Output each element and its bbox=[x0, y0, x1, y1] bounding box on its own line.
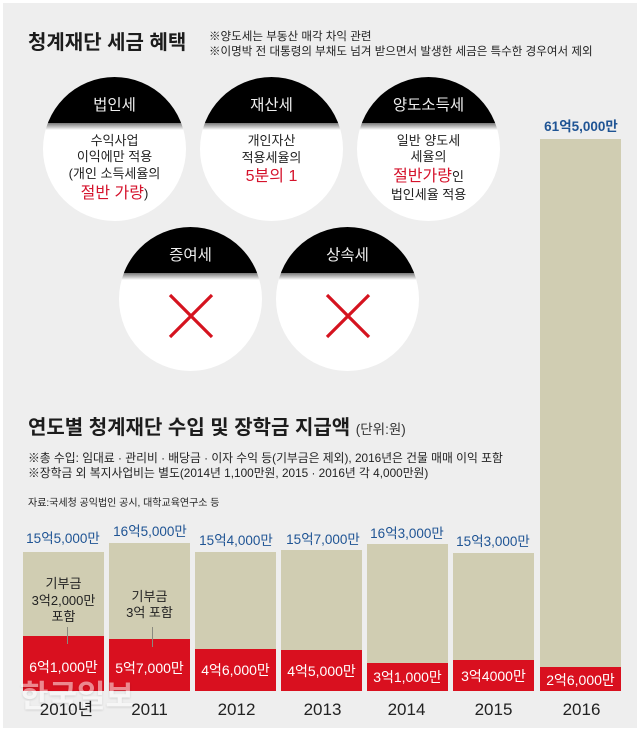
bar: 2010 bbox=[23, 552, 104, 691]
panel: inheritance tax circle bbox=[276, 227, 419, 371]
bar segment: 2012 scholarship: 4억6,000만 bbox=[201, 662, 270, 678]
watermark: 한국일보 bbox=[20, 679, 134, 714]
title: yearly income and scholarships: 연도별 청계재단 수입 및 장학금 지급액 (단위:원) bbox=[28, 417, 406, 439]
notes: tax benefit footnotes: ※양도세는 부동산 매각 차익 관련 bbox=[209, 31, 371, 43]
panel: property tax circle bbox=[200, 77, 343, 221]
axis label: 2016: 2016 bbox=[563, 700, 600, 719]
bar value: 2010: 15억5,000만 bbox=[26, 531, 100, 546]
axis label: 2011: 2011 bbox=[131, 700, 168, 719]
panel: capital gains tax circle: 일반 양도세 bbox=[397, 133, 460, 148]
bar value: 2012: 15억4,000만 bbox=[199, 533, 273, 548]
notes: income footnotes: ※총 수입: 임대료 · 관리비 · 배당금 · 이자 수익 등(기부금은 제외), 2016년은 건물 매매 이익 포함 bbox=[28, 451, 503, 465]
panel: property tax circle: 5분의 1 bbox=[246, 168, 297, 185]
panel: capital gains tax circle bbox=[357, 77, 500, 221]
bar segment: 2016 scholarship: 2억6,000만 bbox=[546, 672, 615, 688]
panel: capital gains tax circle: 양도소득세 bbox=[393, 97, 464, 114]
source note: 자료:국세청 공익법인 공시, 대학교육연구소 등 bbox=[28, 498, 219, 509]
notes: income footnotes bbox=[28, 451, 503, 480]
bar: 2013 bbox=[281, 550, 362, 691]
panel: capital gains tax circle: 세율의 bbox=[411, 149, 446, 164]
leader line: 2010 bbox=[67, 627, 68, 644]
axis label: 2012: 2012 bbox=[218, 700, 255, 719]
panel: corporate tax circle: 이익에만 적용 bbox=[77, 149, 152, 164]
panel: property tax circle: 개인자산 bbox=[248, 133, 295, 148]
bar segment: 2013 scholarship bbox=[281, 650, 362, 691]
bar: 2016 bbox=[540, 139, 621, 691]
bar segment: 2014 scholarship: 3억1,000만 bbox=[373, 669, 442, 685]
axis label: 2014: 2014 bbox=[388, 700, 425, 719]
bar value: 2011: 16억5,000만 bbox=[113, 524, 187, 539]
bar segment: 2012 scholarship bbox=[195, 649, 276, 691]
notes: tax benefit footnotes bbox=[209, 30, 593, 58]
bar segment: 2014 scholarship bbox=[367, 663, 448, 691]
panel: inheritance tax circle: 상속세 bbox=[326, 247, 369, 264]
icon: red cross bbox=[168, 294, 214, 338]
panel: capital gains tax circle: 법인세율 적용 bbox=[391, 187, 466, 202]
notes: tax benefit footnotes: ※이명박 전 대통령의 부채도 넘겨 받으면서 발생한 세금은 특수한 경우여서 제외 bbox=[209, 46, 593, 58]
title: foundation tax benefits: 청계재단 세금 혜택 bbox=[28, 32, 186, 54]
annotation: 2011 donation: 기부금 bbox=[132, 589, 167, 604]
annotation: 2011 donation: 3억 포함 bbox=[126, 605, 173, 620]
panel: gift tax circle bbox=[119, 227, 262, 371]
bar value: 2013: 15억7,000만 bbox=[286, 532, 360, 547]
bar value: 2016: 61억5,000만 bbox=[544, 119, 618, 134]
bar value: 2015: 15억3,000만 bbox=[456, 534, 530, 549]
annotation: 2011 donation bbox=[126, 589, 173, 620]
icon: red cross bbox=[326, 294, 370, 338]
bar segment: 2011 scholarship bbox=[109, 639, 190, 691]
annotation: 2010 donation bbox=[32, 576, 95, 624]
bar: 2011 bbox=[109, 543, 190, 691]
panel: corporate tax circle bbox=[43, 77, 186, 221]
bar segment: 2010 scholarship: 6억1,000만 bbox=[29, 659, 98, 675]
panel: gift tax circle: 증여세 bbox=[169, 247, 212, 264]
axis label: 2015: 2015 bbox=[475, 700, 512, 719]
panel: corporate tax circle: 법인세 bbox=[93, 97, 136, 114]
bar segment: 2013 scholarship: 4억5,000만 bbox=[287, 663, 356, 679]
bar segment: 2010 scholarship bbox=[23, 636, 104, 691]
panel: corporate tax circle: (개인 소득세율의 bbox=[69, 166, 160, 181]
bar: 2014 bbox=[367, 544, 448, 691]
notes: income footnotes: ※장학금 외 복지사업비는 별도(2014년 1,100만원, 2015 · 2016년 각 4,000만원) bbox=[28, 466, 428, 480]
bar: 2012 bbox=[195, 552, 276, 691]
bar segment: 2016 scholarship bbox=[540, 667, 621, 691]
annotation: 2010 donation: 3억2,000만 bbox=[32, 592, 95, 608]
bar: 2015 bbox=[453, 553, 534, 691]
axis label: 2010: 2010년 bbox=[40, 700, 93, 719]
panel: property tax circle: 적용세율의 bbox=[242, 150, 301, 165]
annotation: 2010 donation: 포함 bbox=[52, 609, 75, 624]
panel: capital gains tax circle: 절반가량인 bbox=[393, 168, 464, 185]
panel: property tax circle: 재산세 bbox=[250, 97, 293, 114]
leader line: 2011 bbox=[152, 627, 153, 647]
axis label: 2013: 2013 bbox=[304, 700, 341, 719]
bar segment: 2011 scholarship: 5억7,000만 bbox=[115, 660, 184, 676]
panel: corporate tax circle: 수익사업 bbox=[91, 133, 138, 148]
panel: corporate tax circle: 절반 가량) bbox=[81, 185, 148, 202]
bar segment: 2015 scholarship: 3억4000만 bbox=[461, 668, 526, 684]
bar value: 2014: 16억3,000만 bbox=[370, 526, 444, 541]
annotation: 2010 donation: 기부금 bbox=[46, 576, 81, 591]
bar segment: 2015 scholarship bbox=[453, 660, 534, 691]
